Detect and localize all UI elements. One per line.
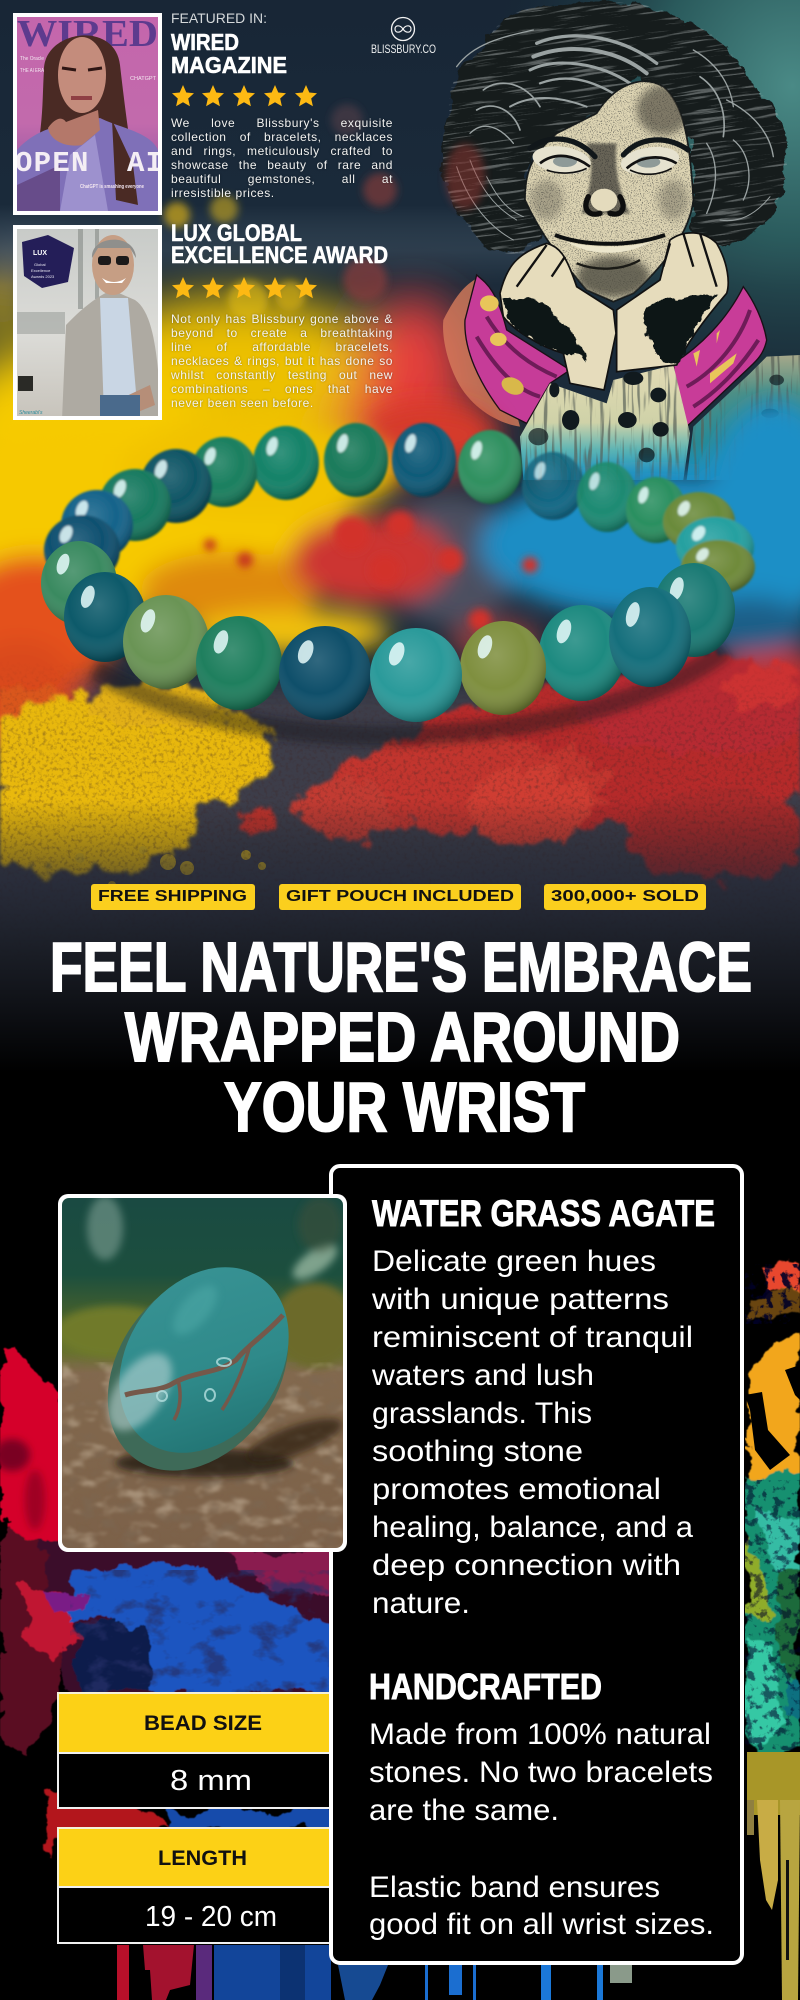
text block: Wired review: We love Blissbury's exquisite	[171, 116, 393, 130]
magazine cover: Lux award	[13, 225, 162, 420]
gemstone description text	[371, 1245, 693, 1620]
left paint splash	[0, 1348, 632, 2000]
magazine cover: Wired	[13, 13, 163, 215]
text block: Lux review: combinations – ones that have	[171, 382, 393, 396]
panel: gemstone description	[331, 1166, 742, 1963]
magazine cover: Lux award: Sheerabi's	[19, 410, 43, 416]
back beads	[44, 423, 755, 594]
hero photographic background	[0, 0, 800, 1100]
cover woman	[17, 35, 158, 211]
benefit chip: gift pouch	[279, 884, 521, 910]
gemstone description text: reminiscent of tranquil	[372, 1321, 693, 1354]
cover small text	[20, 56, 156, 190]
OPEN AI cover line: OPEN AI	[15, 147, 163, 180]
heading: Wired Magazine: MAGAZINE	[171, 52, 287, 78]
blurred leaves and moss	[55, 1196, 357, 1367]
bottom fade to black	[0, 800, 800, 1110]
right paint splash	[745, 1262, 800, 2000]
portrait illustration of smiling woman	[403, 0, 800, 480]
handcrafted description text: Elastic band ensures	[369, 1871, 660, 1904]
handcrafted description text: good fit on all wrist sizes.	[369, 1908, 714, 1941]
shoulder and blouse left side	[443, 277, 520, 427]
text block: Wired review: irresistible prices.	[171, 186, 275, 200]
scarf left	[465, 275, 570, 423]
award badge: LUX	[33, 250, 47, 257]
spec table: bead size: BEAD SIZE	[144, 1712, 262, 1735]
yellow drips	[747, 1752, 800, 2000]
spec table: length	[58, 1828, 338, 1943]
handcrafted description text: are the same.	[369, 1794, 559, 1827]
benefit chip: units sold	[544, 884, 706, 910]
heading: Lux Global Excellence Award	[171, 220, 388, 269]
award badge: Global	[34, 262, 46, 267]
gemstone photo	[55, 1194, 357, 1552]
Blissbury logo	[371, 18, 436, 56]
man in grey blazer	[62, 235, 158, 420]
spec table: bead size: 8 mm	[170, 1765, 252, 1797]
cover small text: ChatGPT is smashing everyone	[80, 184, 144, 190]
polished water grass agate stone	[104, 1267, 289, 1471]
gemstone description text: promotes emotional	[372, 1473, 661, 1506]
nose and mouth	[555, 189, 665, 269]
face	[520, 73, 697, 307]
front beads	[41, 541, 735, 722]
text block: Wired review: and rings, meticulously crafted to	[171, 144, 393, 158]
five star rating: Wired	[172, 85, 317, 106]
five star rating: Lux	[172, 277, 317, 298]
award badge	[22, 235, 74, 288]
blurred bokeh colour wash	[0, 220, 490, 520]
yellow granules	[75, 846, 266, 889]
heading: Lux Global Excellence Award: LUX GLOBAL	[171, 220, 302, 247]
text block: Wired review: beautiful gemstones, all at	[171, 172, 393, 186]
main headline	[50, 928, 752, 1146]
hair	[439, 0, 788, 254]
spec table: length: 19 - 20 cm	[145, 1901, 277, 1933]
eyes and brows	[530, 139, 688, 178]
heading: Wired Magazine: WIRED	[171, 29, 239, 55]
benefit chip: free shipping	[91, 884, 255, 910]
text block: Wired review: collection of bracelets, necklaces	[171, 130, 393, 144]
drips beneath spec tables	[117, 1945, 632, 2000]
black flecks in orange	[745, 1365, 800, 1470]
gemstone description text: Delicate green hues	[372, 1245, 656, 1278]
shadow under bracelet	[95, 650, 725, 736]
text block: Lux review: necklaces & rings, but it has done so	[171, 354, 393, 368]
spec table: length: LENGTH	[158, 1847, 247, 1870]
hands resting under chin	[500, 233, 728, 390]
gemstone description text: healing, balance, and a	[372, 1511, 693, 1544]
scarf right	[673, 287, 767, 427]
award badge: Excellence	[31, 268, 51, 273]
text block: Wired review	[171, 116, 393, 200]
text block: Lux review: line of affordable bracelets,	[171, 340, 393, 354]
right teal vignette behind portrait	[420, 0, 800, 430]
masthead: WIRED	[17, 13, 158, 55]
award badge: Awards 2023	[31, 274, 55, 279]
spec table: bead size	[58, 1693, 338, 1808]
far soft-focus powder	[0, 400, 800, 1085]
main headline: WRAPPED AROUND	[125, 998, 680, 1076]
featured-in label: FEATURED IN:	[171, 10, 267, 26]
heading: Wired Magazine	[171, 29, 287, 78]
gemstone description text: waters and lush	[371, 1359, 594, 1392]
handcrafted description text: stones. No two bracelets	[369, 1756, 713, 1789]
beaded gemstone bracelet	[41, 423, 755, 736]
coloured powder on table	[0, 384, 800, 920]
text block: Lux review: beyond to create a breathtaking	[171, 326, 393, 340]
blue dark cracks	[70, 1570, 335, 1692]
sleeves with polka dots	[513, 353, 800, 480]
red crumbs inside ring	[204, 511, 538, 631]
heading: handcrafted: HANDCRAFTED	[369, 1666, 602, 1707]
main headline: YOUR WRIST	[224, 1068, 585, 1146]
red shade patches	[0, 1439, 45, 1530]
powder grain texture	[0, 672, 800, 882]
shadow under stone	[115, 1449, 295, 1477]
gemstone description text: deep connection with	[372, 1549, 681, 1582]
text block: Lux review: whilst constantly testing out new	[171, 368, 393, 382]
cover small text: THE AI ERA	[20, 68, 45, 74]
benefit chip: units sold: 300,000+ SOLD	[551, 888, 699, 905]
gemstone description text: grasslands. This	[372, 1397, 592, 1430]
heading: Lux Global Excellence Award: EXCELLENCE AWARD	[171, 242, 388, 269]
handcrafted description text	[369, 1718, 714, 1941]
Blissbury logo: BLISSBURY.CO	[371, 42, 436, 56]
cover small text: CHATGPT	[130, 76, 156, 82]
gemstone description text: soothing stone	[372, 1435, 583, 1468]
cover small text: The Oracle	[20, 56, 44, 62]
dark navy top band	[0, 0, 800, 285]
text block: Wired review: showcase the beauty of rare and	[171, 158, 393, 172]
gemstone description text: with unique patterns	[371, 1283, 669, 1316]
rock texture	[62, 1362, 343, 1548]
heading: water grass agate: WATER GRASS AGATE	[372, 1193, 715, 1234]
text block: Lux review: Not only has Blissbury gone above &	[171, 312, 393, 326]
foreground powder heaps	[0, 657, 800, 880]
text block: Lux review: never been seen before.	[171, 396, 314, 410]
gemstone description text: nature.	[372, 1587, 470, 1620]
benefit chip: gift pouch: GIFT POUCH INCLUDED	[286, 888, 514, 905]
yellow and red bokeh dots	[164, 104, 397, 320]
text block: Lux review	[170, 312, 394, 410]
handcrafted description text: Made from 100% natural	[369, 1718, 711, 1751]
benefit chip: free shipping: FREE SHIPPING	[98, 888, 247, 905]
